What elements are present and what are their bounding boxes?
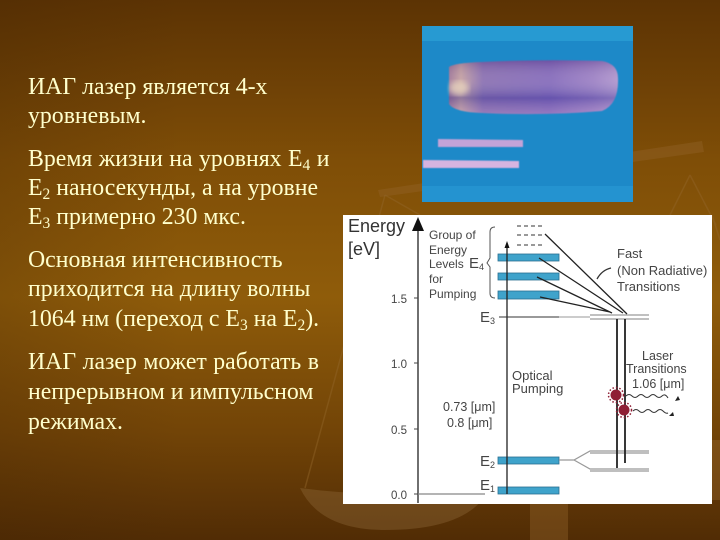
text: lifetimes: Е3 примерно 230 мкс. (28, 204, 246, 232)
energy level diagram (343, 215, 712, 504)
axis title: [eV] (348, 239, 380, 259)
text: operation modes: непрерывном и импульсном (28, 379, 313, 405)
axis title: Energy (348, 216, 405, 236)
laser transitions: Transitions (626, 362, 687, 376)
large crystal (449, 60, 618, 114)
E2 split level (559, 451, 649, 471)
pump group label (429, 227, 495, 301)
text: operation modes (28, 349, 319, 435)
laser transitions: 1.06 [μm] (632, 377, 684, 391)
text: lifetimes: Е2 наносекунды, а на уровне (28, 175, 318, 203)
level labels: 2 (490, 460, 495, 470)
text: laser levels: ИАГ лазер является 4-х (28, 74, 267, 100)
fast transitions: Transitions (617, 279, 681, 294)
pump group label: Levels (429, 257, 464, 271)
text: main intensity: 1064 нм (переход с Е3 на Е2). (28, 306, 319, 334)
level labels: 1 (490, 484, 495, 494)
level labels: E (480, 453, 490, 470)
pump group label: 4 (479, 262, 484, 272)
laser transitions: Laser (642, 349, 673, 363)
pump group label: Pumping (429, 287, 476, 301)
energy axis: 0.0 (391, 490, 407, 502)
small rod upper (438, 139, 523, 147)
text: lifetimes (28, 146, 329, 232)
text: main intensity: Основная интенсивность (28, 247, 283, 273)
dashed upper levels (517, 226, 544, 245)
text: main intensity: приходится на длину волны (28, 276, 310, 302)
fast transitions: (Non Radiative) (617, 263, 707, 278)
optical pumping arrow: 0.8 [μm] (447, 416, 492, 430)
level labels: 3 (490, 316, 495, 326)
photo: laser crystal rods (422, 26, 633, 202)
pump group label: E (469, 255, 479, 272)
laser transitions (608, 319, 687, 468)
optical pumping arrow: 0.73 [μm] (443, 400, 495, 414)
text: operation modes: ИАГ лазер может работать в (28, 349, 319, 375)
blue energy bands (498, 254, 559, 494)
small rod lower (423, 160, 519, 168)
pump group label: Energy (429, 243, 467, 257)
optical pumping arrow (443, 241, 563, 494)
fast transitions (537, 234, 707, 314)
energy axis: 1.5 (391, 294, 407, 306)
pump group label: for (429, 272, 443, 286)
level labels: E (480, 309, 490, 326)
pump group label: Group of (429, 228, 476, 242)
text: lifetimes: Время жизни на уровнях Е4 и (28, 146, 329, 174)
E3 level (499, 315, 649, 319)
level labels: E (480, 477, 490, 494)
energy axis: 1.0 (391, 359, 407, 371)
energy axis: 0.5 (391, 425, 407, 437)
optical pumping arrow: Pumping (512, 381, 563, 396)
text: main intensity (28, 247, 319, 334)
text: laser levels (28, 74, 268, 129)
optical pumping arrow: Optical (512, 368, 553, 383)
text: operation modes: режимах. (28, 409, 123, 435)
energy axis (391, 217, 485, 503)
level labels (480, 309, 495, 494)
axis title (348, 216, 405, 259)
text: laser levels: уровневым. (28, 103, 146, 129)
fast transitions: Fast (617, 246, 643, 261)
